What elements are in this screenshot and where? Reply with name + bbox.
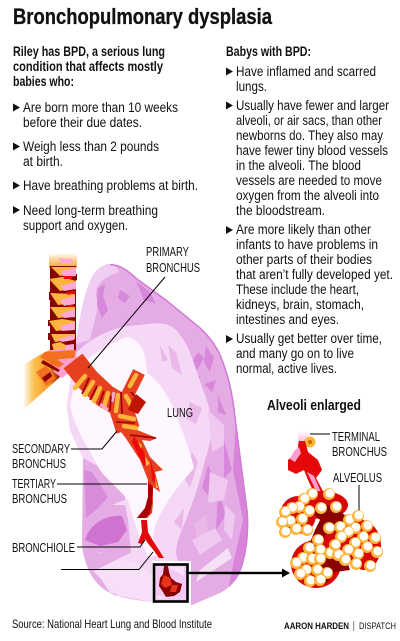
blood vessels: [280, 491, 381, 588]
text block: left bullet list: before their due dates.: [23, 115, 142, 130]
air sacs: [276, 488, 383, 587]
label: terminal bronchus: TERMINAL: [332, 430, 380, 444]
orange cartilage rings: [75, 375, 136, 428]
terminal bronchus: [288, 431, 326, 497]
text block: right bullet list: lungs.: [236, 79, 267, 94]
label: primary bronchus: PRIMARY: [146, 245, 189, 259]
label: bronchiole: BRONCHIOLE: [12, 541, 75, 555]
label: tertiary bronchus: BRONCHUS: [12, 492, 67, 506]
text block: right bullet list: and many go on to live: [236, 346, 354, 361]
text block: right bullet list: the bloodstream.: [236, 203, 325, 218]
label: terminal bronchus: [332, 430, 387, 459]
leader lines: [57, 277, 359, 570]
text block: left bullet list: Are born more than 10 weeks: [23, 100, 178, 115]
text block: right bullet list: Are more likely than other: [236, 222, 371, 237]
text block: left intro: condition that affects mostly: [13, 59, 163, 74]
text block: right bullet list: Usually get better over time,: [236, 331, 382, 346]
text block: right bullet list: vessels are needed to move: [236, 173, 382, 188]
label: primary bronchus: BRONCHUS: [146, 261, 200, 275]
illustration: left main bronchus: [23, 350, 78, 410]
illustration: alveoli cluster: [276, 431, 383, 588]
text block: right bullet list: intestines and eyes.: [236, 312, 339, 327]
label: tertiary bronchus: TERTIARY: [12, 477, 56, 491]
source note: Source: National Heart Lung and Blood Institute: [12, 617, 212, 631]
darker patches upper lobe: [97, 281, 232, 530]
credit: [284, 621, 396, 632]
text block: right bullet list: oxygen from the alveoli into: [236, 188, 379, 203]
illustration: right main bronchus and branches: [73, 361, 164, 558]
text block: right bullet list: [226, 64, 393, 376]
text block: right bullet list: other parts of their bodies: [236, 252, 372, 267]
arrow to enlarged alveoli: [188, 568, 290, 578]
text block: right bullet list: kidneys, brain, stomach,: [236, 297, 364, 312]
mini alveoli cluster: [159, 566, 182, 597]
text block: right bullet list: in the alveoli. The blood: [236, 158, 361, 173]
text block: left bullet list: Weigh less than 2 pounds: [23, 139, 159, 154]
text block: left bullet list: at birth.: [23, 154, 63, 169]
illustration: trachea: [48, 253, 77, 352]
label: tertiary bronchus: [12, 477, 67, 506]
label: alveolus: ALVEOLUS: [333, 471, 382, 485]
illustration: lung: [67, 262, 250, 605]
lower right edge: [228, 422, 248, 588]
white zone: [70, 337, 194, 556]
text block: right bullet list: These include the heart,: [236, 282, 359, 297]
text block: left bullet list: [13, 100, 198, 233]
mottled patches: [160, 345, 208, 542]
text block: right bullet list: Have inflamed and scarred: [236, 64, 376, 79]
inset box: [152, 561, 191, 605]
heading: babys with BPD: Babys with BPD:: [226, 44, 311, 59]
text block: right bullet list: normal, active lives.: [236, 361, 337, 376]
label: primary bronchus: [146, 245, 200, 275]
text block: left intro: [13, 44, 165, 89]
text block: left bullet list: Need long-term breathing: [23, 203, 158, 218]
lower left dark lobe: [84, 505, 131, 553]
text block: left bullet list: support and oxygen.: [23, 218, 128, 233]
heading: alveoli enlarged: Alveoli enlarged: [267, 398, 361, 414]
label: secondary bronchus: [12, 442, 70, 471]
upper pale left lobe: [76, 264, 120, 344]
outline edge: [110, 264, 248, 573]
text block: right bullet list: infants to have problems in: [236, 237, 378, 252]
title: Bronchopulmonary dysplasia: [13, 4, 273, 29]
light zone: [67, 323, 211, 600]
label: secondary bronchus: BRONCHUS: [12, 457, 66, 471]
text block: left bullet list: Have breathing problems at birth.: [23, 178, 198, 193]
label: lung: LUNG: [167, 406, 193, 420]
credit: AARON HARDEN: [284, 621, 349, 632]
label: secondary bronchus: SECONDARY: [12, 442, 70, 456]
text block: left intro: babies who:: [13, 74, 74, 89]
text block: left intro: Riley has BPD, a serious lung: [13, 44, 165, 59]
